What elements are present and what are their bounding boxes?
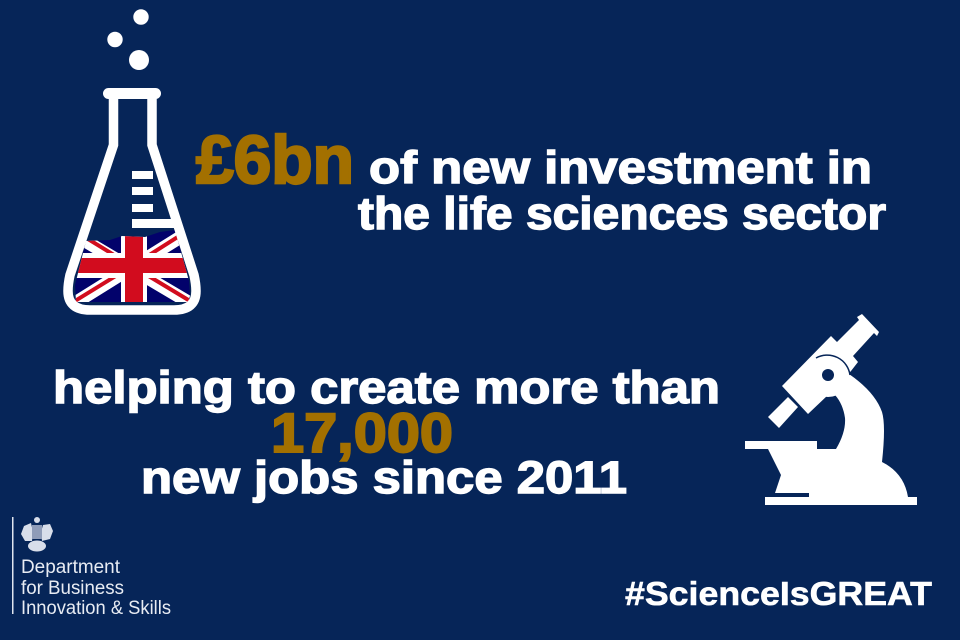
hashtag: #ScienceIsGREAT [625, 575, 932, 612]
bubbles [107, 9, 149, 70]
arm, stage and foot [745, 374, 917, 505]
pivot arc gap [816, 355, 850, 375]
department name: Innovation & Skills [21, 598, 171, 619]
flask rim [103, 88, 161, 99]
logo rule [12, 517, 14, 614]
heading: jobs figure: 17,000 [271, 401, 453, 464]
department name [21, 557, 171, 619]
text: helping to create more than: helping to create more than [53, 362, 720, 413]
pivot disc [806, 353, 850, 397]
pivot hole [822, 369, 834, 381]
objective [768, 397, 798, 428]
graduations [132, 171, 175, 228]
text: of new investment in: of new investment in [369, 142, 872, 193]
text: new jobs since 2011: new jobs since 2011 [141, 452, 627, 503]
flask outline [68, 95, 196, 310]
department name: Department [21, 557, 121, 578]
union flag liquid [75, 230, 190, 302]
logo: department for business innovation and skills [12, 517, 171, 619]
icon: royal crest [21, 517, 53, 552]
icon: flask with union flag [68, 9, 196, 310]
icon: microscope [745, 314, 917, 505]
heading: investment figure: £6bn [196, 122, 354, 198]
text: the life sciences sector: the life sciences sector [358, 188, 886, 239]
department name: for Business [21, 578, 124, 599]
eyepiece and body [782, 314, 879, 414]
